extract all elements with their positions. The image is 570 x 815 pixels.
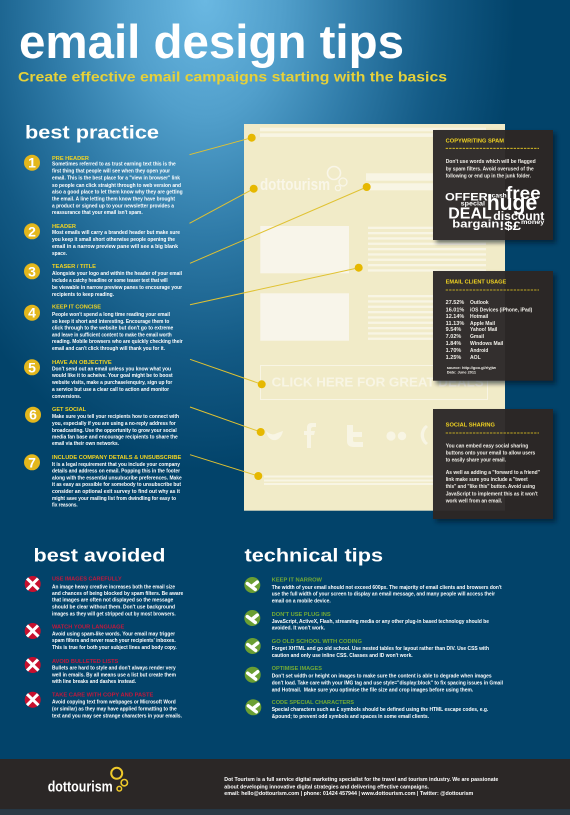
item 1: pre header: PRE HEADER xyxy=(52,156,89,162)
item 4: keep it concise: and leave in sufficient content to make the email worth xyxy=(52,332,172,338)
item 7: include company details xyxy=(24,454,182,508)
avoided 3 xyxy=(25,657,176,685)
usage table: 16.01% xyxy=(446,307,465,313)
usage table: Yahoo! Mail xyxy=(470,327,498,333)
item 6: get social xyxy=(25,407,179,447)
panel: copywriting spam xyxy=(433,130,556,243)
usage table: 9.54% xyxy=(446,327,462,333)
heading: technical tips: technical tips xyxy=(244,545,383,566)
usage table: Apple Mail xyxy=(470,321,496,327)
tip 4 xyxy=(245,666,503,693)
item 2: header: HEADER xyxy=(52,224,76,230)
usage table: AOL xyxy=(470,355,482,361)
word cloud: bargain xyxy=(452,218,500,230)
usage table: 1.70% xyxy=(446,348,462,354)
item 3: teaser / title xyxy=(24,263,182,298)
item 4: keep it concise xyxy=(24,304,183,352)
avoided 3: well in emails. By all means use a list but create them xyxy=(51,672,176,678)
tip 1: The width of your email should not exceed 600px. The majority of email clients and browsers don't xyxy=(272,585,502,591)
item 1: pre header xyxy=(24,155,183,216)
footer text: Dot Tourism is a full service digital marketing specialist for the travel and tourism industry. We are passionate xyxy=(224,777,498,783)
item 5: have an objective: website visits, make a purchase/enquiry, sign up for xyxy=(51,380,172,386)
tip 4: OPTIMISE IMAGES xyxy=(272,666,322,672)
icon: wrench xyxy=(245,638,261,654)
avoided 1 xyxy=(25,576,183,617)
tip 2: avoided. It won't work. xyxy=(272,625,325,631)
item 4: keep it concise: click through to the website but don't go to extreme xyxy=(52,326,173,332)
word cloud: huge xyxy=(487,190,537,215)
tip 3: Forget XHTML and go old school. Use nested tables for layout rather than DIV. Use CSS with xyxy=(272,646,489,652)
item 5: have an objective: HAVE AN OBJECTIVE xyxy=(52,360,112,366)
avoided 1: images as they will get stripped out by most browsers. xyxy=(52,611,176,617)
item 7: include company details: fix reasons. xyxy=(52,502,78,508)
item 1: pre header: Sometimes referred to as trust earning text this is the xyxy=(52,162,176,168)
footer text: about developing innovative digital strategies and delivering effective campaigns. xyxy=(224,784,430,790)
badge 2 xyxy=(24,223,40,239)
usage table: 7.02% xyxy=(446,334,462,340)
item 4: keep it concise: KEEP IT CONCISE xyxy=(52,304,101,310)
panel: social sharing: SOCIAL SHARING xyxy=(446,423,495,429)
item 1: pre header: so people can click straight through to web version and xyxy=(52,183,181,189)
panel: email client usage: EMAIL CLIENT USAGE xyxy=(446,280,507,286)
usage table: 27.52% xyxy=(446,300,465,306)
usage table: Hotmail xyxy=(470,314,489,320)
subtitle: Create effective email campaigns starting with the basics xyxy=(18,69,447,85)
tip 4: don't load. Take care with your IMG tag and use style="display:block" to fix spacing issues in Gmail xyxy=(272,680,503,686)
item 7: include company details: It is a legal requirement that you include your company xyxy=(52,462,180,468)
panel: copywriting spam: COPYWRITING SPAM xyxy=(446,139,505,145)
item 5: have an objective: Don't send out an email unless you know what you xyxy=(52,366,171,372)
avoided 1: should be clear without them. Don't use background xyxy=(52,604,175,610)
mockup teaser bars xyxy=(366,173,446,190)
panel: email mockup sheet xyxy=(244,124,505,511)
panel: copywriting spam: following or end up in the junk folder. xyxy=(446,173,532,179)
tip 1: email on a mobile device. xyxy=(272,598,331,604)
item 1: pre header: reassurance that your email isn't spam. xyxy=(52,210,143,216)
avoided 4: TAKE CARE WITH COPY AND PASTE xyxy=(52,693,154,699)
heading: best practice: best practice xyxy=(25,121,159,142)
avoided 4 xyxy=(25,692,182,719)
usage table: Android xyxy=(470,348,488,354)
usage table xyxy=(446,300,533,361)
word cloud: DEAL xyxy=(448,205,492,222)
panel: social sharing: work well from an email. xyxy=(445,498,503,504)
source note: Date: June 2011 xyxy=(447,369,477,374)
badge 5: 5 xyxy=(28,359,36,375)
badge 7 xyxy=(24,454,40,470)
item 6: get social: email via their own networks. xyxy=(52,441,119,447)
icon: red cross xyxy=(25,692,41,708)
badge 3 xyxy=(24,263,40,279)
word cloud: money xyxy=(521,219,545,226)
panel: social sharing: link make sure you include a "tweet xyxy=(446,477,528,483)
item 6: get social: media fan base and encourage recipients to share the xyxy=(52,434,178,440)
item 7: include company details: along with the essential unsubscribe preferences. Make xyxy=(52,475,182,481)
item 1: pre header: first thing that people will see when they open your xyxy=(52,168,170,174)
item 7: include company details: consider an optional exit survey to find out why as it xyxy=(52,489,180,495)
panel: social sharing: buttons onto your email to allow users xyxy=(446,450,535,456)
avoided 3: Bullets are hard to style and don't always render very xyxy=(52,665,176,671)
usage table: iOS Devices (iPhone, iPad) xyxy=(470,307,533,313)
item 5: have an objective: would like it to acheive. Your goal might be to boost xyxy=(51,373,173,379)
item 7: include company details: it as easy as possible for somebody to unsubscribe but xyxy=(52,482,181,488)
mockup call to action: CLICK HERE FOR GREAT DEALS xyxy=(272,375,484,390)
word cloud: cash xyxy=(492,193,507,200)
item 1: pre header: the email. A line letting them know they have brought xyxy=(52,196,175,202)
tip 5: &pound; to prevent odd symbols and spaces in some email clients. xyxy=(272,714,429,720)
badge 2: 2 xyxy=(28,223,36,239)
panel: copywriting spam: by spam filters. Avoid overused of the xyxy=(446,166,534,172)
footer band xyxy=(0,759,570,815)
badge 6 xyxy=(25,407,41,423)
usage table: 1.25% xyxy=(446,355,462,361)
avoided 2: This is true for both your subject lines and body copy. xyxy=(52,645,177,651)
usage table: Windows Mail xyxy=(470,341,504,347)
heading: best avoided: best avoided xyxy=(34,545,166,566)
item 5: have an objective xyxy=(24,359,173,400)
badge 4: 4 xyxy=(28,305,36,321)
tip 5 xyxy=(245,699,489,720)
item 1: pre header: email. This is the best place for a "view in browser" link xyxy=(52,176,180,182)
badge 7: 7 xyxy=(28,454,36,470)
icon: wrench xyxy=(244,610,260,626)
avoided 2: Avoid using spam-like words. Your email may trigger xyxy=(52,631,175,637)
panel: email client usage xyxy=(433,271,556,384)
mockup image 1 xyxy=(260,226,349,273)
panel: social sharing: to easily share your email. xyxy=(446,457,507,463)
badge 4 xyxy=(24,305,40,321)
icon: wrench xyxy=(245,699,261,715)
item 7: include company details: details and address on email. Popping this in the footer xyxy=(52,468,180,474)
item 6: get social: Make sure you tell your recipients how to connect with xyxy=(52,414,179,420)
avoided 2 xyxy=(25,623,177,651)
item 7: include company details: INCLUDE COMPANY DETAILS & UNSUBSCRIBE xyxy=(52,455,182,461)
icon: red cross xyxy=(25,623,41,639)
avoided 4: text and you may see strange characters in your emails. xyxy=(52,713,182,719)
mockup pre-header bars xyxy=(260,128,486,137)
item 6: get social: broadcasting. Use the opportunity to grow your social xyxy=(52,428,177,434)
avoided 1: An image heavy creative increases both the email size xyxy=(52,584,175,590)
item 3: teaser / title: include a catchy headline or some teaser text that will xyxy=(52,278,168,284)
tip 2: DON'T USE PLUG INS xyxy=(272,612,331,618)
item 1: pre header: also a good place to let them know why they are getting xyxy=(52,190,183,196)
icon: red cross xyxy=(25,657,41,673)
word cloud: special xyxy=(461,201,485,208)
avoided 4: Avoid copying text from webpages or Microsoft Word xyxy=(52,699,176,705)
item 7: include company details: might save your mailing list from dwindling for easy to xyxy=(52,496,177,502)
badge 5 xyxy=(24,359,40,375)
panel: copywriting spam: Don't use words which will be flagged xyxy=(446,159,536,165)
badge 6: 6 xyxy=(29,407,37,423)
mockup text 2 xyxy=(368,295,486,340)
item 4: keep it concise: so keep it short and interesting. Encourage them to xyxy=(52,319,170,325)
usage table: 1.84% xyxy=(446,341,462,347)
icon: wrench xyxy=(244,577,260,593)
word cloud: !$£ xyxy=(499,219,521,233)
item 3: teaser / title: Alongside your logo and within the header of your email xyxy=(52,271,182,277)
mockup text 1 xyxy=(368,227,486,272)
tip 1 xyxy=(244,577,502,604)
icon: wrench xyxy=(245,667,261,683)
panel: social sharing: As well as adding a "forward to a friend" xyxy=(446,470,540,476)
avoided 1: and chances of being blocked by spam filters. Be aware xyxy=(52,591,183,597)
word cloud: OFFER xyxy=(445,192,488,204)
avoided 3: with line breaks and dashes instead. xyxy=(51,679,136,685)
panel: social sharing: You can embed easy social sharing xyxy=(446,443,528,449)
avoided 2: spam filters and never reach your recipients' inboxes. xyxy=(52,638,176,644)
tip 1: use the full width of your screen to display an email message, and many people will access their xyxy=(272,591,495,597)
item 2: header: email in a narrow preview pane will see a big blank xyxy=(52,244,178,250)
item 3: teaser / title: be viewable in narrow preview panes to encourage your xyxy=(52,285,182,291)
avoided 1: that images are often not displayed so the message xyxy=(52,597,173,603)
usage table: Gmail xyxy=(470,334,485,340)
usage table: Outlook xyxy=(470,300,489,306)
badge 3: 3 xyxy=(28,263,36,279)
mockup image 2 xyxy=(260,293,349,341)
tip 2 xyxy=(244,610,489,631)
mockup logo: dottourism xyxy=(260,176,330,194)
connector dots xyxy=(248,134,371,480)
word cloud: discount xyxy=(493,211,544,223)
footer logo: dottourism xyxy=(48,779,113,796)
usage table: 11.13% xyxy=(446,321,465,327)
item 5: have an objective: conversions. xyxy=(52,394,81,400)
footer text xyxy=(224,777,498,797)
tip 3 xyxy=(245,638,489,659)
item 2: header: Most emails will carry a branded header but make sure xyxy=(52,230,180,236)
item 2: header: space. xyxy=(52,251,67,257)
tip 4: and Hotmail. Make sure you optimise the file size and crop images before using them. xyxy=(272,687,474,693)
item 1: pre header: a product or signed up to your newsletter provides a xyxy=(52,204,174,210)
avoided 2: WATCH YOUR LANGUAGE xyxy=(52,625,125,631)
title: email design tips xyxy=(19,15,404,68)
panel: social sharing: this" and "like this" button. Avoid using xyxy=(446,484,535,490)
footer text: email: hello@dottourism.com | phone: 01424 457944 | www.dottourism.com | Twitter: @dottourism xyxy=(224,791,474,797)
item 4: keep it concise: reading. Mobile browsers who are quickly checking their xyxy=(52,339,183,345)
source note: source: http://goo.gl/rlyjtw xyxy=(447,365,497,370)
badge 1: 1 xyxy=(28,155,36,171)
source note xyxy=(447,365,497,374)
mockup social icons xyxy=(266,423,428,448)
avoided 4: (or similar) as they may have applied formatting to the xyxy=(52,706,177,712)
item 3: teaser / title: recipients to keep reading. xyxy=(52,292,114,298)
tip 3: caution and only use inline CSS. Classes and ID won't work. xyxy=(272,653,413,659)
item 6: get social: GET SOCIAL xyxy=(52,407,87,413)
word cloud: free xyxy=(506,183,541,203)
item 4: keep it concise: People won't spend a long time reading your email xyxy=(52,312,170,318)
tip 2: JavaScript, ActiveX, Flash, streaming media or any other plug-in based technology should be xyxy=(272,619,489,625)
avoided 1: USE IMAGES CAREFULLY xyxy=(52,577,122,583)
avoided 3: AVOID BULLETED LISTS xyxy=(52,659,119,665)
word cloud xyxy=(445,183,545,233)
item 5: have an objective: a service but use a clear call to action and monitor xyxy=(52,387,169,393)
mockup call to action xyxy=(260,366,488,400)
panel: social sharing xyxy=(433,409,556,522)
item 2: header xyxy=(24,223,180,257)
mockup logo xyxy=(260,166,347,194)
mockup footer bars xyxy=(264,476,486,485)
item 6: get social: you, especially if you are using a no-reply address for xyxy=(52,421,176,427)
item 3: teaser / title: TEASER / TITLE xyxy=(52,264,96,270)
tip 5: CODE SPECIAL CHARACTERS xyxy=(272,700,354,706)
item 4: keep it concise: email and can't click through will thank you for it. xyxy=(52,346,165,352)
tip 3: GO OLD SCHOOL WITH CODING xyxy=(272,639,362,645)
panel: social sharing: JavaScript to implement this as it won't xyxy=(446,491,538,497)
item 2: header: you keep it small short otherwise people opening the xyxy=(52,237,175,243)
tip 5: Special characters such as £ symbols should be defined using the HTML escape codes, e.g. xyxy=(272,707,489,713)
tip 1: KEEP IT NARROW xyxy=(272,578,322,584)
icon: red cross xyxy=(25,576,41,592)
connector lines xyxy=(190,138,367,476)
usage table: 12.14% xyxy=(446,314,465,320)
tip 4: Don't set width or height on images to make sure the content is able to degrade when images xyxy=(272,673,492,679)
badge 1 xyxy=(24,155,40,171)
footer logo xyxy=(48,768,128,796)
